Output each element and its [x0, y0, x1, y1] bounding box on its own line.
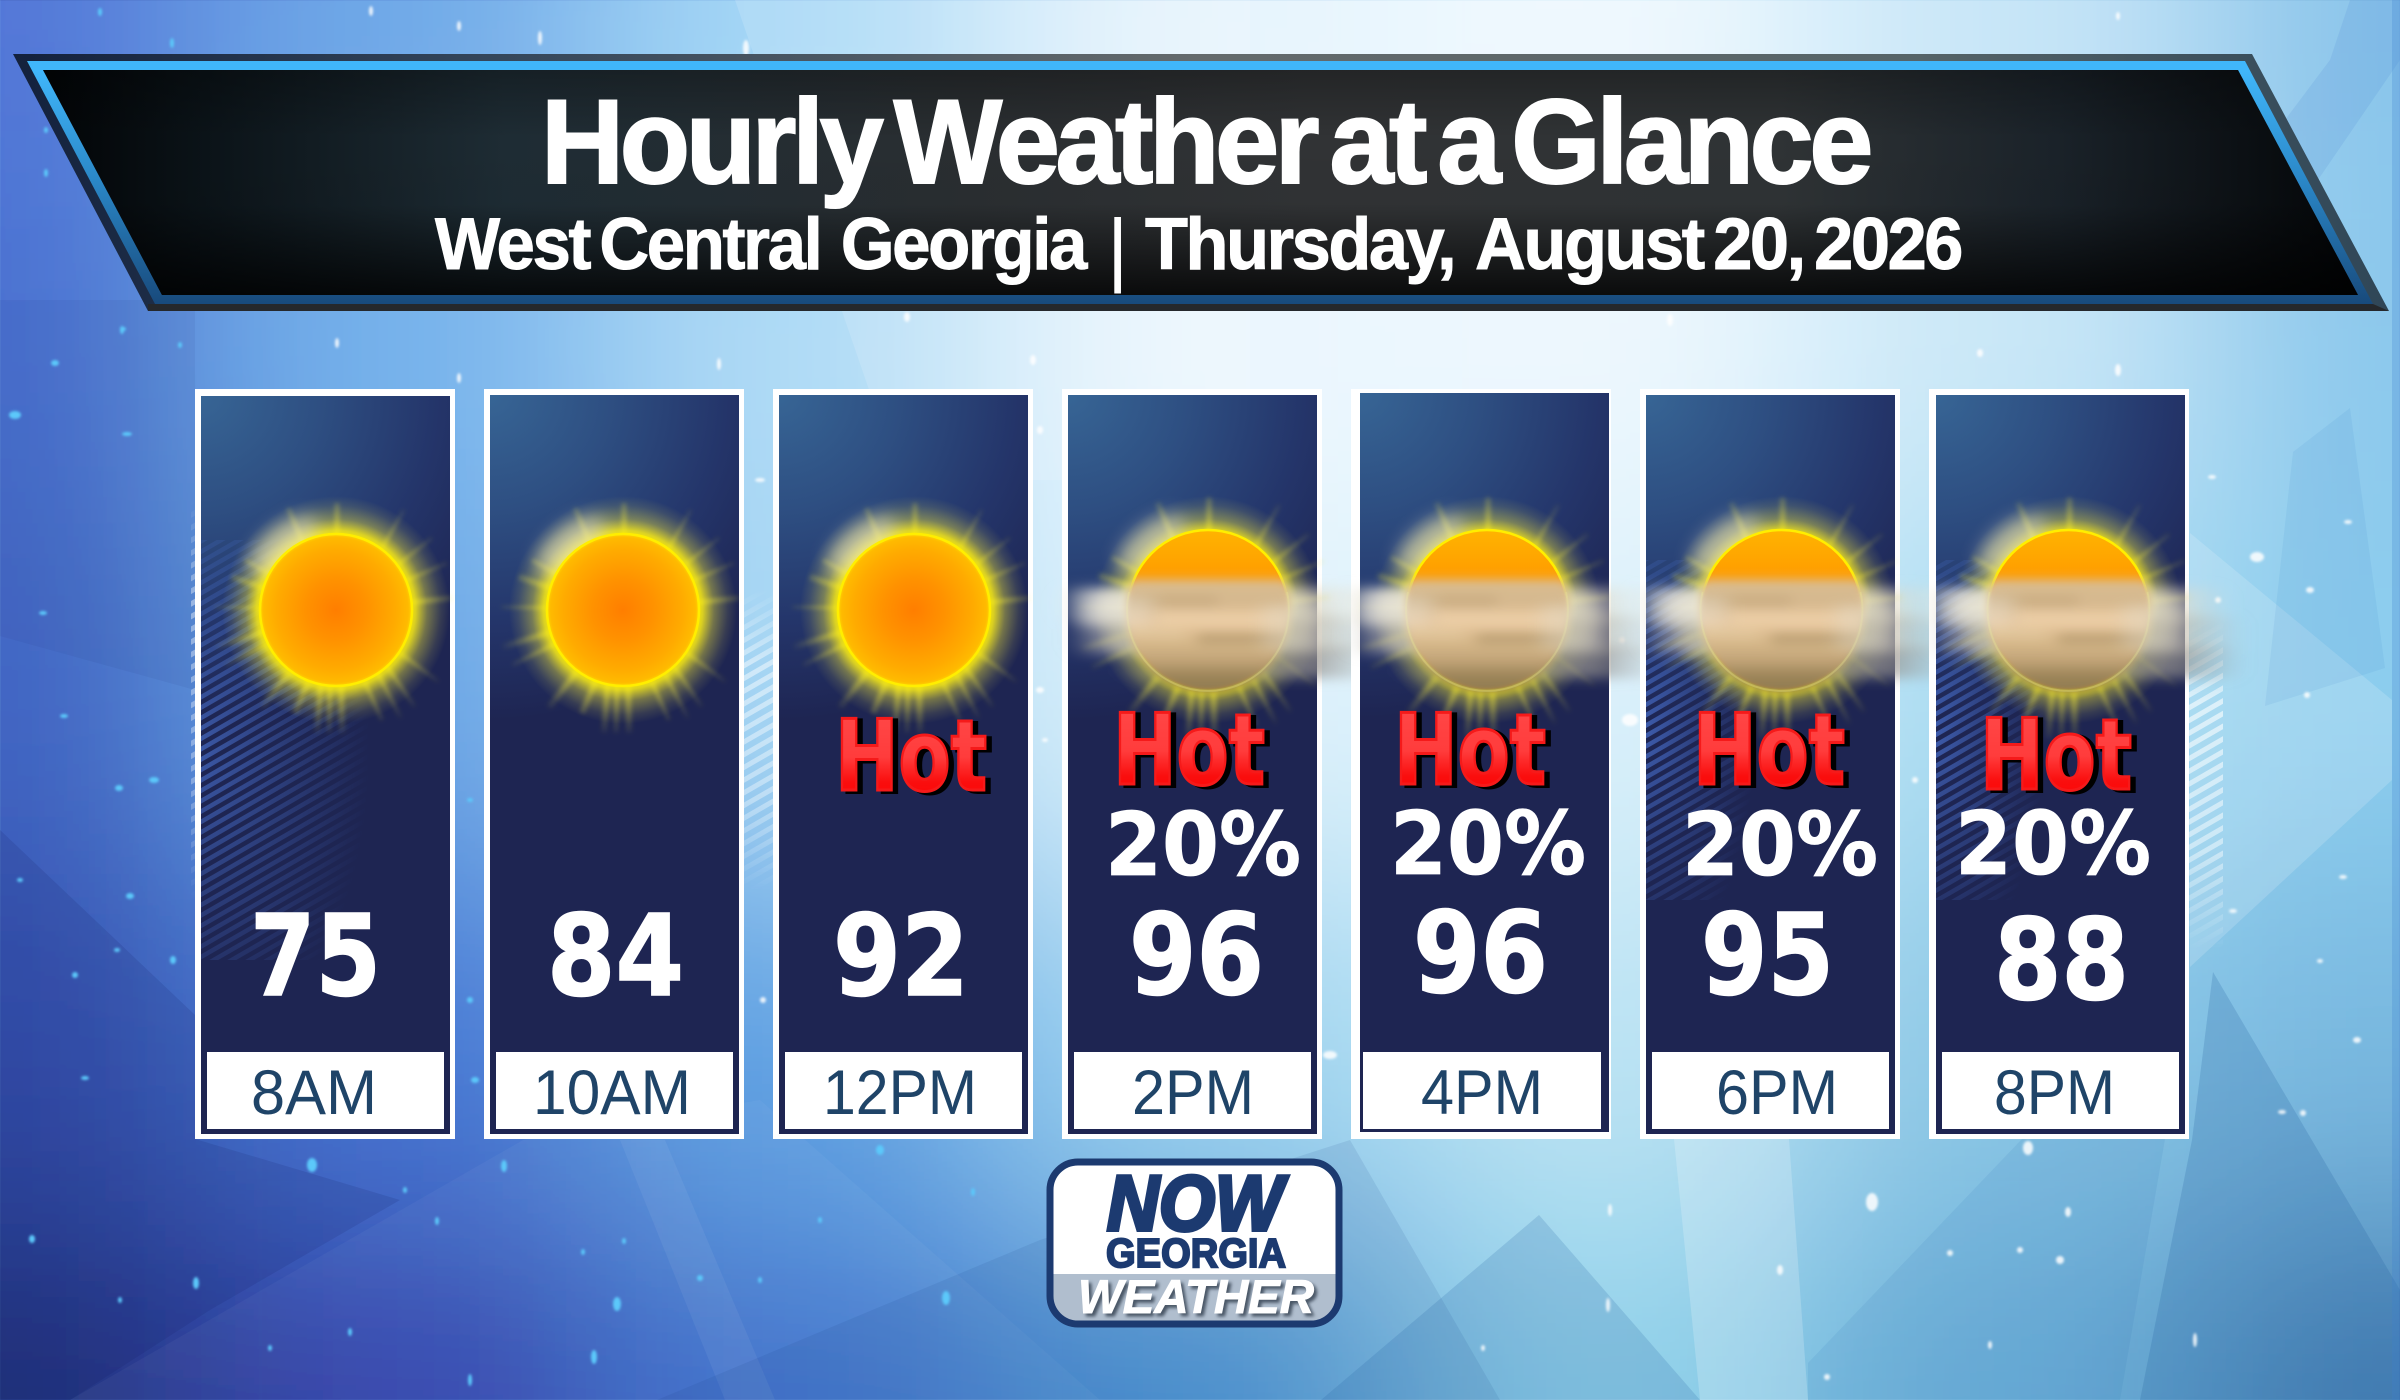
time label	[1074, 1052, 1311, 1129]
rain chance: 20%	[1682, 794, 1878, 896]
panel: 6PM	[1640, 389, 1929, 1139]
icon: partly cloudy sun	[1632, 490, 1956, 739]
hot label: Hot	[1698, 696, 1850, 810]
panel: 10AM	[484, 389, 744, 1139]
hot label: Hot	[1113, 694, 1265, 808]
time label: 4PM	[1421, 1058, 1543, 1128]
time label: 8AM	[251, 1058, 377, 1128]
time label: 10AM	[533, 1058, 691, 1128]
temperature: 88	[1994, 896, 2129, 1026]
rain chance: 20%	[1955, 793, 2151, 895]
hot label: Hot	[1980, 699, 2132, 813]
icon: sun	[214, 496, 452, 733]
diagonal stripes on background	[191, 500, 2223, 950]
subtitle: |	[1107, 203, 1128, 294]
time label	[785, 1052, 1022, 1129]
logo wordmark: GEORGIA: GEORGIA	[1106, 1230, 1286, 1276]
rain chance: 20%	[1390, 793, 1586, 895]
time label: 12PM	[823, 1058, 977, 1128]
time label	[496, 1052, 733, 1129]
panel: 8AM	[195, 389, 455, 1139]
time label	[1363, 1052, 1601, 1129]
logo wordmark: NOW: NOW	[1107, 1159, 1289, 1247]
subtitle: West Central Georgia	[435, 204, 1089, 285]
icon: partly cloudy sun	[1337, 490, 1662, 739]
title: Hourly Weather at a Glance	[541, 75, 1870, 209]
time label	[207, 1052, 444, 1129]
time label: 6PM	[1716, 1058, 1838, 1128]
temperature: 95	[1701, 891, 1834, 1021]
subtitle: Thursday, August 20, 2026	[1145, 204, 1961, 285]
hot label: Hot	[835, 700, 987, 814]
logo wordmark: WEATHER: WEATHER	[1078, 1270, 1314, 1323]
temperature: 96	[1413, 889, 1548, 1019]
icon: partly cloudy sun	[1918, 490, 2244, 739]
hot label: Hot	[1693, 694, 1845, 808]
temperature: 96	[1129, 891, 1264, 1021]
hot label: Hot	[1985, 701, 2137, 815]
temperature: 75	[250, 892, 381, 1022]
icon: sun	[792, 496, 1030, 733]
subtitle	[435, 203, 1961, 294]
temperature: 84	[547, 892, 684, 1022]
temperature: 92	[833, 892, 969, 1022]
time label: 2PM	[1132, 1058, 1254, 1128]
icon: partly cloudy sun	[1058, 490, 1383, 739]
hot label: Hot	[1399, 696, 1551, 810]
time label	[1652, 1052, 1889, 1129]
panel: 4PM	[1337, 389, 1662, 1139]
time label	[1942, 1052, 2179, 1129]
panel: 12PM	[773, 389, 1033, 1139]
hot label: Hot	[1118, 696, 1270, 810]
panel: 8PM	[1918, 389, 2244, 1139]
hot label: Hot	[840, 702, 992, 816]
logo: Now Georgia Weather	[1050, 1159, 1339, 1326]
rain chance: 20%	[1105, 794, 1301, 896]
icon: sun	[501, 496, 739, 733]
time label: 8PM	[1994, 1058, 2115, 1128]
panel: 2PM	[1058, 389, 1383, 1139]
hot label: Hot	[1394, 694, 1546, 808]
title banner	[13, 54, 2389, 311]
logo wordmark: WEATHER: WEATHER	[1081, 1273, 1317, 1326]
